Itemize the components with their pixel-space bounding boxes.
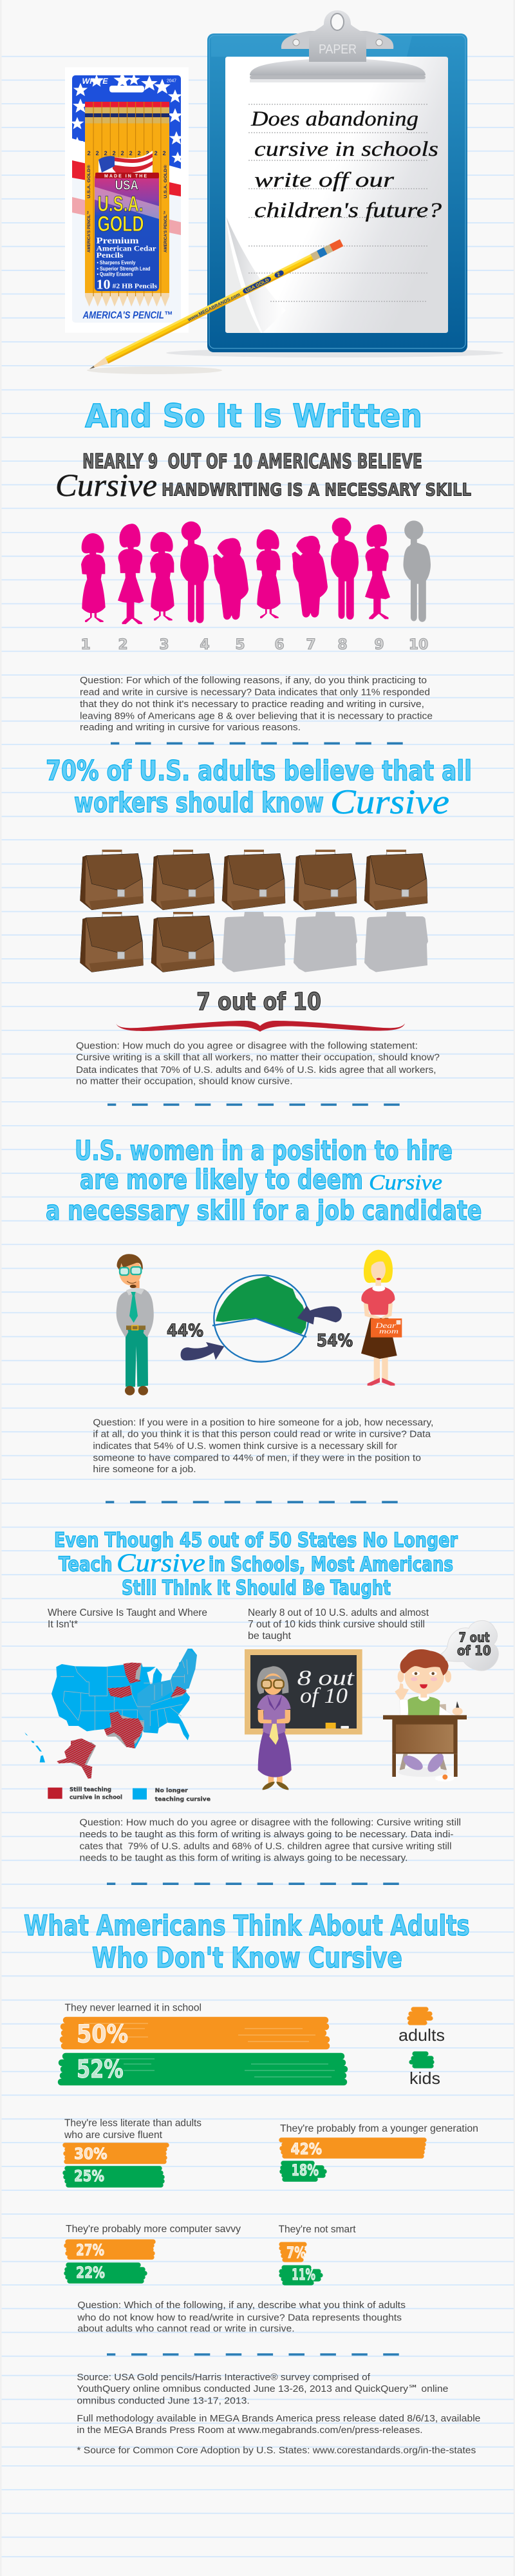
adults bar	[63, 2020, 326, 2049]
ten pencils in package: 2	[96, 150, 99, 156]
person 9	[365, 524, 390, 619]
yellow pencil lying across: USA GOLD	[245, 278, 270, 294]
ten pencils in package: 2	[154, 150, 158, 156]
question text 2: no matter their occupation, should know cursive.	[76, 1076, 293, 1087]
front label: GOLD	[98, 212, 144, 236]
briefcase 2	[151, 849, 214, 910]
pack slogan: AMERICA'S PENCIL™	[82, 310, 173, 321]
map caption: Where Cursive Is Taught and Where	[48, 1607, 207, 1618]
ten pencils in package: 2	[146, 150, 149, 156]
question text 1: Question: For which of the following reasons, if any, do you think practicing to	[80, 675, 427, 686]
ten pencils in package: 2	[163, 150, 166, 156]
metal clip	[250, 10, 426, 82]
page curl	[226, 216, 286, 333]
clipboard with handwritten question	[166, 10, 503, 357]
question text 1: that they do not think it's necessary to practice reading and writing in cursive,	[80, 699, 424, 710]
map caption	[48, 1607, 207, 1630]
label	[64, 2118, 201, 2141]
front label: • Quality Erasers	[97, 272, 133, 278]
bars: less literate	[64, 2118, 201, 2185]
front label: 10	[97, 277, 111, 292]
person 5	[213, 538, 248, 620]
question text 2	[76, 1041, 440, 1087]
ten pencils in package	[85, 102, 169, 307]
adults bar: 30%	[74, 2145, 108, 2163]
section 4 heading: Still Think It Should Be Taught	[122, 1577, 391, 1600]
front label: • Sharpens Evenly	[97, 260, 136, 266]
ten pencils in package: 2	[121, 150, 124, 156]
teacher	[257, 1666, 292, 1790]
adults bar: 42%	[291, 2140, 322, 2158]
map legend: Still teaching	[70, 1787, 111, 1794]
chalkboard	[245, 1649, 362, 1734]
count labels 1 to 10: 7	[306, 637, 316, 653]
kids bar: 22%	[76, 2264, 105, 2282]
front label	[95, 173, 159, 292]
source notes: Source: USA Gold pencils/Harris Interactive® survey comprised of	[77, 2372, 371, 2383]
section 4 heading: Teach	[59, 1553, 112, 1576]
question text 4: Question: How much do you agree or disagree with the following: Cursive writing still	[80, 1817, 461, 1828]
person 2	[118, 524, 144, 624]
section 3 heading: Cursive	[369, 1171, 442, 1195]
kids bar: 52%	[77, 2055, 124, 2083]
section 3 heading	[46, 1135, 482, 1226]
survey caption: 7 out of 10 kids think cursive should still	[248, 1619, 425, 1630]
survey caption: be taught	[248, 1631, 292, 1642]
count labels 1 to 10: 8	[337, 637, 348, 653]
question text 3: hire someone for a job.	[93, 1464, 196, 1475]
states still teaching, shadows	[69, 1663, 187, 1766]
ten pencils in package: U.S.A. GOLD®	[86, 165, 91, 198]
front label: Premium	[97, 236, 139, 246]
section 2 heading	[46, 755, 472, 821]
legend: adults and kids	[398, 2009, 445, 2088]
person 7	[292, 536, 328, 618]
ten pencils in package: AMERICA'S PENCIL™	[164, 211, 168, 252]
pie chart	[212, 1275, 308, 1362]
question text 3	[93, 1417, 433, 1475]
kids bar	[61, 2055, 344, 2083]
map legend: teaching cursive	[155, 1797, 211, 1803]
question text: write off our	[254, 169, 394, 192]
question text	[250, 108, 442, 222]
yellow pencil lying across: 2	[276, 271, 281, 278]
label: They're not smart	[279, 2224, 356, 2235]
source notes	[77, 2372, 480, 2456]
hanging hole	[109, 86, 144, 93]
briefcase 7	[151, 912, 214, 972]
question text: Does abandoning	[250, 108, 418, 131]
section 5 heading	[24, 1909, 470, 1975]
question text 1	[80, 675, 433, 733]
question text 2: Data indicates that 70% of U.S. adults and 64% of U.S. kids agree that all workers,	[76, 1065, 436, 1075]
chalkboard: of 10	[300, 1684, 348, 1708]
section 4 heading: in Schools, Most Americans	[209, 1553, 453, 1576]
ten pencils in package: 2	[138, 150, 141, 156]
legend: adults and kids: kids	[409, 2069, 440, 2088]
arrow to women's slice	[297, 1305, 342, 1325]
front label: Pencils	[97, 252, 124, 260]
section 2 heading: workers should know	[74, 787, 324, 819]
pack number: 2047	[167, 79, 176, 84]
kids bar: 25%	[74, 2167, 104, 2185]
person 10, grey	[403, 520, 431, 622]
Hawaii	[24, 1732, 45, 1763]
question text 2: Cursive writing is a skill that all workers, no matter their occupation, should know?	[76, 1052, 440, 1063]
front label: #2 HB Pencils	[112, 283, 158, 290]
count labels 1 to 10	[80, 637, 428, 653]
woman figure: mom	[379, 1329, 398, 1336]
bars: computer savvy	[66, 2224, 241, 2282]
briefcase 10, grey	[364, 912, 428, 972]
person 1	[81, 533, 106, 622]
question text 5: who do not know how to read/write in cursive? Data represents thoughts	[77, 2312, 402, 2323]
count labels 1 to 10: 3	[159, 637, 169, 653]
map caption: It Isn't*	[48, 1619, 78, 1630]
pencil branding: www.MEGABRANDS.com	[186, 291, 241, 323]
count labels 1 to 10: 10	[409, 637, 428, 653]
US map	[24, 1649, 197, 1779]
question text 5: Question: Which of the following, if any, describe what you think of adults	[77, 2300, 406, 2311]
dotted ruled lines	[248, 104, 427, 301]
pictogram: 7 of 10 briefcases	[80, 849, 428, 972]
ten pencils in package: U.S.A. GOLD®	[163, 165, 168, 198]
states still teaching	[57, 1663, 186, 1779]
front label: • Superior Strength Lead	[97, 266, 151, 272]
pack logo: WRITE	[82, 77, 109, 86]
source notes: in the MEGA Brands Press Room at www.megabrands.com/en/press-releases.	[77, 2425, 423, 2436]
map legend: No longer	[155, 1788, 188, 1794]
paper sheet	[225, 57, 448, 333]
adults bar: 7%	[286, 2244, 306, 2262]
flag on label	[98, 151, 153, 173]
hiring illustration: man, pie chart, woman	[117, 1250, 402, 1396]
section 5 heading: Who Don't Know Cursive	[92, 1942, 402, 1975]
bars: never learned in school	[61, 2003, 344, 2083]
7 out of 10 label: 7 out of 10	[196, 988, 321, 1016]
chalk writing: 8 out	[297, 1667, 355, 1690]
question text 1: leaving 89% of Americans age 8 & over believing that it is necessary to practice	[80, 711, 433, 722]
woman figure	[361, 1250, 402, 1386]
count labels 1 to 10: 2	[118, 637, 128, 653]
section 3 heading: are more likely to deem	[80, 1164, 363, 1195]
section 2 heading: Cursive	[330, 782, 449, 821]
briefcase 4	[294, 849, 357, 910]
kids bar	[66, 2264, 145, 2282]
label: who are cursive fluent	[64, 2130, 163, 2141]
front label: MADE IN THE	[104, 174, 147, 179]
ten pencils in package: 2	[113, 150, 116, 156]
front label: American Cedar	[97, 245, 156, 252]
front label: U.S.A.	[98, 192, 143, 216]
boy at desk	[383, 1649, 467, 1781]
question text 4: cates that 79% of U.S. adults and 68% of U.S. children agree that cursive writing still	[80, 1841, 452, 1852]
question text 1: reading and writing in cursive for various reasons.	[80, 722, 301, 733]
question text 4: needs to be taught as this form of writing is always going to be necessary.	[80, 1852, 408, 1864]
envelope text: Dear	[375, 1321, 396, 1330]
source notes: omnibus conducted June 13-17, 2013.	[77, 2396, 250, 2407]
classroom illustration	[245, 1620, 498, 1790]
question text: cursive in schools	[254, 138, 438, 161]
speech cloud: of 10	[457, 1643, 491, 1658]
source notes: Full methodology available in MEGA Brands America press release dated 8/6/13, available	[77, 2413, 480, 2424]
section 1 headline	[55, 450, 471, 503]
question text 4: needs to be taught as this form of writing is always going to be necessary. Data indi-	[80, 1829, 454, 1840]
yellow pencil lying across	[87, 240, 343, 374]
title: And So It Is Written	[85, 397, 422, 435]
ten pencils in package: 2	[129, 150, 133, 156]
adults bar	[281, 2140, 424, 2158]
kids bar	[65, 2167, 162, 2185]
section 1 headline: Cursive	[55, 467, 157, 503]
question text 3: if at all, do you think it is that this person could read or write in cursive? Data	[93, 1429, 431, 1440]
arrow to men's slice	[181, 1342, 224, 1360]
bars: not smart	[279, 2224, 356, 2284]
survey caption: Nearly 8 out of 10 U.S. adults and almost	[248, 1607, 429, 1618]
person 3	[150, 532, 174, 620]
person 8	[331, 518, 359, 620]
kids bar: 11%	[292, 2266, 315, 2284]
label: They're probably from a younger generation	[280, 2123, 478, 2134]
count labels 1 to 10: 9	[374, 637, 384, 653]
source notes: * Source for Common Core Adoption by U.S. States: www.corestandards.org/in-the-states	[77, 2445, 476, 2456]
section 4 heading	[54, 1529, 458, 1600]
count labels 1 to 10: 5	[235, 637, 245, 653]
briefcase 6	[80, 912, 143, 972]
question text 3: someone to have compared to 44% of men, if they were in the position to	[93, 1452, 421, 1463]
label: They're less literate than adults	[64, 2118, 201, 2129]
section 4 heading: Cursive	[117, 1548, 205, 1577]
ten pencils in package: 2	[88, 150, 91, 156]
44 percent label: 44%	[167, 1321, 203, 1341]
count labels 1 to 10: 6	[274, 637, 285, 653]
man figure	[117, 1254, 154, 1396]
question text 4	[80, 1817, 461, 1864]
question text 2: Question: How much do you agree or disagree with the following statement:	[76, 1041, 418, 1052]
source notes: YouthQuery online omnibus conducted June 13-26, 2013 and QuickQuery℠ online	[77, 2383, 448, 2394]
pictogram: 9 of 10 people	[81, 518, 431, 624]
question text: children's future?	[254, 199, 442, 222]
question text 3: indicates that 54% of U.S. women think cursive is a necessary skill for	[93, 1441, 397, 1452]
adults bar	[66, 2241, 153, 2259]
bars: younger generation	[280, 2123, 478, 2179]
question text 1: read and write in cursive is necessary? Data indicates that only 11% responded	[80, 687, 430, 698]
label: They're probably more computer savvy	[66, 2224, 241, 2235]
briefcase 9, grey	[294, 912, 357, 972]
map legend	[48, 1787, 211, 1803]
survey caption	[248, 1607, 429, 1642]
legend: adults and kids: adults	[398, 2025, 445, 2045]
question text 5: about adults who cannot read or write in cursive.	[77, 2324, 295, 2334]
kids bar: 18%	[291, 2161, 319, 2179]
briefcase 3	[222, 849, 285, 910]
speech cloud: 7 out	[459, 1629, 490, 1645]
question text 3: Question: If you were in a position to hire someone for a job, how necessary,	[93, 1417, 433, 1428]
count labels 1 to 10: 4	[200, 637, 210, 653]
front label: USA	[115, 178, 138, 193]
adults bar: 27%	[76, 2241, 104, 2259]
map legend: cursive in school	[70, 1794, 122, 1801]
briefcase 1	[80, 849, 143, 910]
briefcase 8, grey	[222, 912, 286, 972]
ten pencils in package: 2	[104, 150, 108, 156]
adults bar: 50%	[77, 2020, 128, 2049]
adults bar	[65, 2145, 167, 2163]
question text 5	[77, 2300, 406, 2334]
red brace	[116, 1021, 405, 1032]
ten pencils in package: AMERICA'S PENCIL™	[87, 211, 91, 252]
person 4	[180, 522, 209, 623]
clip brand: PAPER	[319, 43, 357, 57]
label: They never learned it in school	[64, 2003, 201, 2014]
speech cloud	[441, 1620, 498, 1671]
USA Gold pencil package	[65, 67, 189, 332]
person 6	[256, 529, 281, 618]
briefcase 5	[364, 849, 427, 910]
count labels 1 to 10: 1	[80, 637, 91, 653]
54 percent label: 54%	[317, 1331, 353, 1351]
